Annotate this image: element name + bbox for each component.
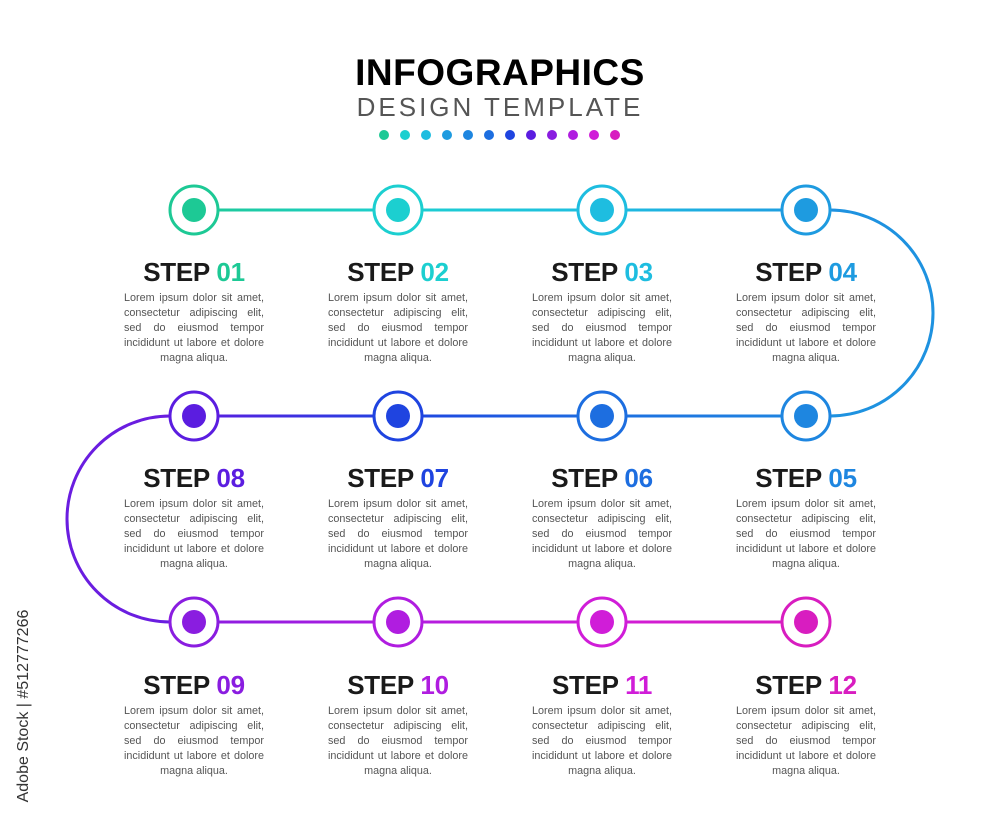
subtitle: DESIGN TEMPLATE [357, 92, 643, 122]
step 02: STEP 02 [347, 257, 449, 287]
step 05: Lorem ipsum dolor sit amet, consectetur adipiscing elit, sed do eiusmod tempor incididunt ut labore et dolore magna aliqua. [736, 498, 876, 570]
step 01: STEP 01 [143, 257, 245, 287]
step 04: STEP 04 [755, 257, 857, 287]
step 08 [124, 463, 264, 570]
step 03: Lorem ipsum dolor sit amet, consectetur adipiscing elit, sed do eiusmod tempor incididunt ut labore et dolore magna aliqua. [532, 292, 672, 364]
step 04 [736, 257, 876, 364]
step 12: STEP 12 [755, 670, 857, 700]
step 11 [532, 670, 672, 777]
step 05 [736, 463, 876, 570]
step 11: Lorem ipsum dolor sit amet, consectetur adipiscing elit, sed do eiusmod tempor incididunt ut labore et dolore magna aliqua. [532, 705, 672, 777]
step 06: STEP 06 [551, 463, 653, 493]
step 02: Lorem ipsum dolor sit amet, consectetur adipiscing elit, sed do eiusmod tempor incididunt ut labore et dolore magna aliqua. [328, 292, 468, 364]
step 12 [736, 670, 876, 777]
step 03 [532, 257, 672, 364]
step 08: Lorem ipsum dolor sit amet, consectetur adipiscing elit, sed do eiusmod tempor incididunt ut labore et dolore magna aliqua. [124, 498, 264, 570]
step 09: Lorem ipsum dolor sit amet, consectetur adipiscing elit, sed do eiusmod tempor incididunt ut labore et dolore magna aliqua. [124, 705, 264, 777]
step 10: STEP 10 [347, 670, 449, 700]
step 08: STEP 08 [143, 463, 245, 493]
step 06: Lorem ipsum dolor sit amet, consectetur adipiscing elit, sed do eiusmod tempor incididunt ut labore et dolore magna aliqua. [532, 498, 672, 570]
step 01: Lorem ipsum dolor sit amet, consectetur adipiscing elit, sed do eiusmod tempor incididunt ut labore et dolore magna aliqua. [124, 292, 264, 364]
step 12: Lorem ipsum dolor sit amet, consectetur adipiscing elit, sed do eiusmod tempor incididunt ut labore et dolore magna aliqua. [736, 705, 876, 777]
step 07 [328, 463, 468, 570]
step 10 [328, 670, 468, 777]
step 07: Lorem ipsum dolor sit amet, consectetur adipiscing elit, sed do eiusmod tempor incididunt ut labore et dolore magna aliqua. [328, 498, 468, 570]
step 07: STEP 07 [347, 463, 449, 493]
step 06 [532, 463, 672, 570]
watermark text: Adobe Stock | #512777266 [15, 610, 32, 802]
step 02 [328, 257, 468, 364]
step 10: Lorem ipsum dolor sit amet, consectetur adipiscing elit, sed do eiusmod tempor incididunt ut labore et dolore magna aliqua. [328, 705, 468, 777]
step 09: STEP 09 [143, 670, 245, 700]
step 09 [124, 670, 264, 777]
title: INFOGRAPHICS [355, 52, 645, 93]
step 03: STEP 03 [551, 257, 653, 287]
step 05: STEP 05 [755, 463, 857, 493]
step 01 [124, 257, 264, 364]
step 11: STEP 11 [552, 670, 652, 700]
step 04: Lorem ipsum dolor sit amet, consectetur adipiscing elit, sed do eiusmod tempor incididunt ut labore et dolore magna aliqua. [736, 292, 876, 364]
nodes [170, 186, 830, 646]
